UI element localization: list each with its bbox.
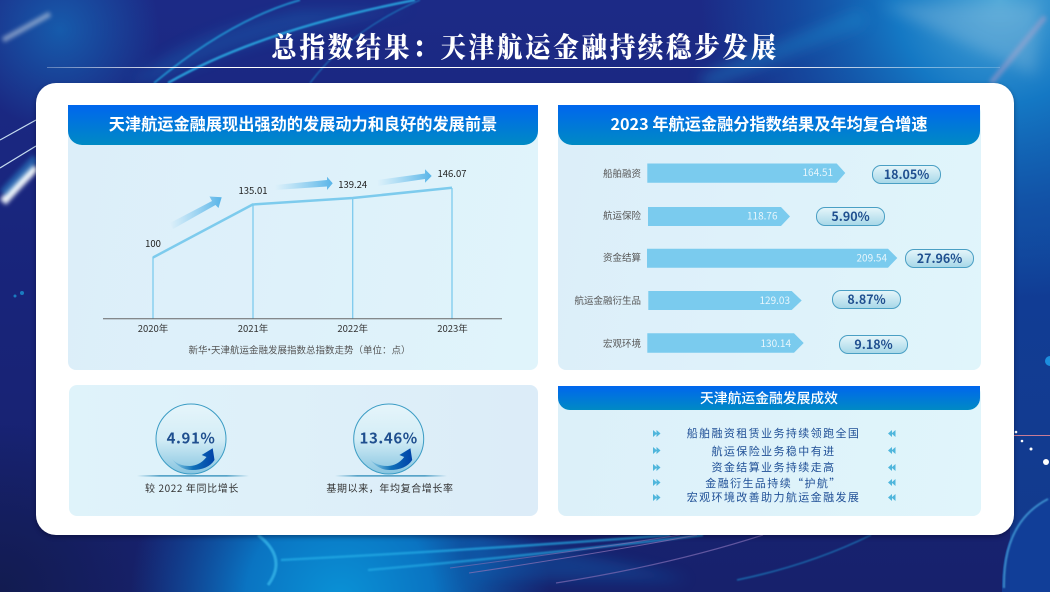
panel: index trend: [68, 105, 538, 370]
growth pill: [832, 290, 901, 309]
growth pill: 5.90%: [831, 206, 870, 225]
gauge: 4.91%: 较 2022 年同比增长: [145, 480, 239, 495]
title: 总指数结果：天津航运金融持续稳步发展: [271, 26, 779, 66]
heading: index trend: [68, 105, 538, 145]
line chart: 100: [145, 236, 161, 250]
growth pill: [839, 335, 908, 354]
white content card: [36, 83, 1014, 535]
bar chart: 118.76: [747, 208, 778, 222]
list chevrons: [653, 430, 896, 501]
heading: achievements: [558, 386, 980, 410]
gauge: 13.46%: [326, 404, 454, 495]
bar chart: 164.51: [802, 164, 833, 179]
bar chart: [647, 164, 898, 353]
growth pill: [816, 207, 885, 226]
growth pill: 27.96%: [917, 248, 962, 267]
growth pill: [872, 165, 941, 184]
heading: index trend: 天津航运金融展现出强劲的发展动力和良好的发展前景: [109, 111, 497, 135]
panel: achievements: [558, 386, 981, 516]
list item: 航运保险业务稳中有进: [712, 443, 836, 459]
title divider: [47, 67, 1000, 68]
bar label: 宏观环境: [603, 336, 641, 350]
line chart: 139.24: [338, 177, 367, 191]
list item: 船舶融资租赁业务持续领跑全国: [687, 425, 860, 441]
gauge: 4.91%: [137, 404, 249, 495]
line chart: 2022年: [337, 321, 368, 335]
bar label: 资金结算: [603, 250, 641, 264]
heading: sub-index results: [558, 105, 980, 145]
list item: 资金结算业务持续走高: [712, 459, 836, 475]
gauge: 13.46%: 基期以来，年均复合增长率: [326, 480, 454, 495]
line chart: 2020年: [138, 321, 169, 335]
line chart: 2023年: [437, 321, 468, 335]
line chart: [103, 166, 502, 356]
growth pill: 9.18%: [854, 334, 893, 353]
heading: achievements: 天津航运金融发展成效: [700, 387, 838, 407]
line chart: 2021年: [238, 321, 269, 335]
growth pill: [905, 249, 974, 268]
growth pill: 8.87%: [847, 289, 886, 308]
arrow: [275, 177, 333, 190]
list item: 金融衍生品持续“护航”: [705, 475, 842, 491]
bar label: 航运保险: [603, 208, 641, 222]
bar chart: 209.54: [856, 250, 887, 264]
arrow: [377, 169, 432, 186]
line chart: 新华·天津航运金融发展指数总指数走势（单位：点）: [188, 342, 411, 356]
gauge: 13.46%: 13.46%: [360, 428, 418, 448]
gauge: 4.91%: 4.91%: [167, 428, 215, 448]
bar chart: 129.03: [759, 292, 790, 307]
list item: 宏观环境改善助力航运金融发展: [687, 489, 860, 505]
line chart: 135.01: [238, 183, 268, 197]
panel: sub-index results: [558, 105, 981, 370]
bar label: 船舶融资: [603, 166, 641, 180]
bar label: 航运金融衍生品: [574, 293, 641, 307]
arrow: [170, 196, 222, 229]
bar chart: 130.14: [760, 335, 791, 350]
growth gauges: [138, 404, 454, 495]
growth pill: 18.05%: [884, 164, 929, 183]
heading: sub-index results: 2023 年航运金融分指数结果及年均复合增速: [610, 111, 928, 135]
panel: growth rates: [69, 385, 538, 516]
line chart: 146.07: [437, 166, 467, 180]
